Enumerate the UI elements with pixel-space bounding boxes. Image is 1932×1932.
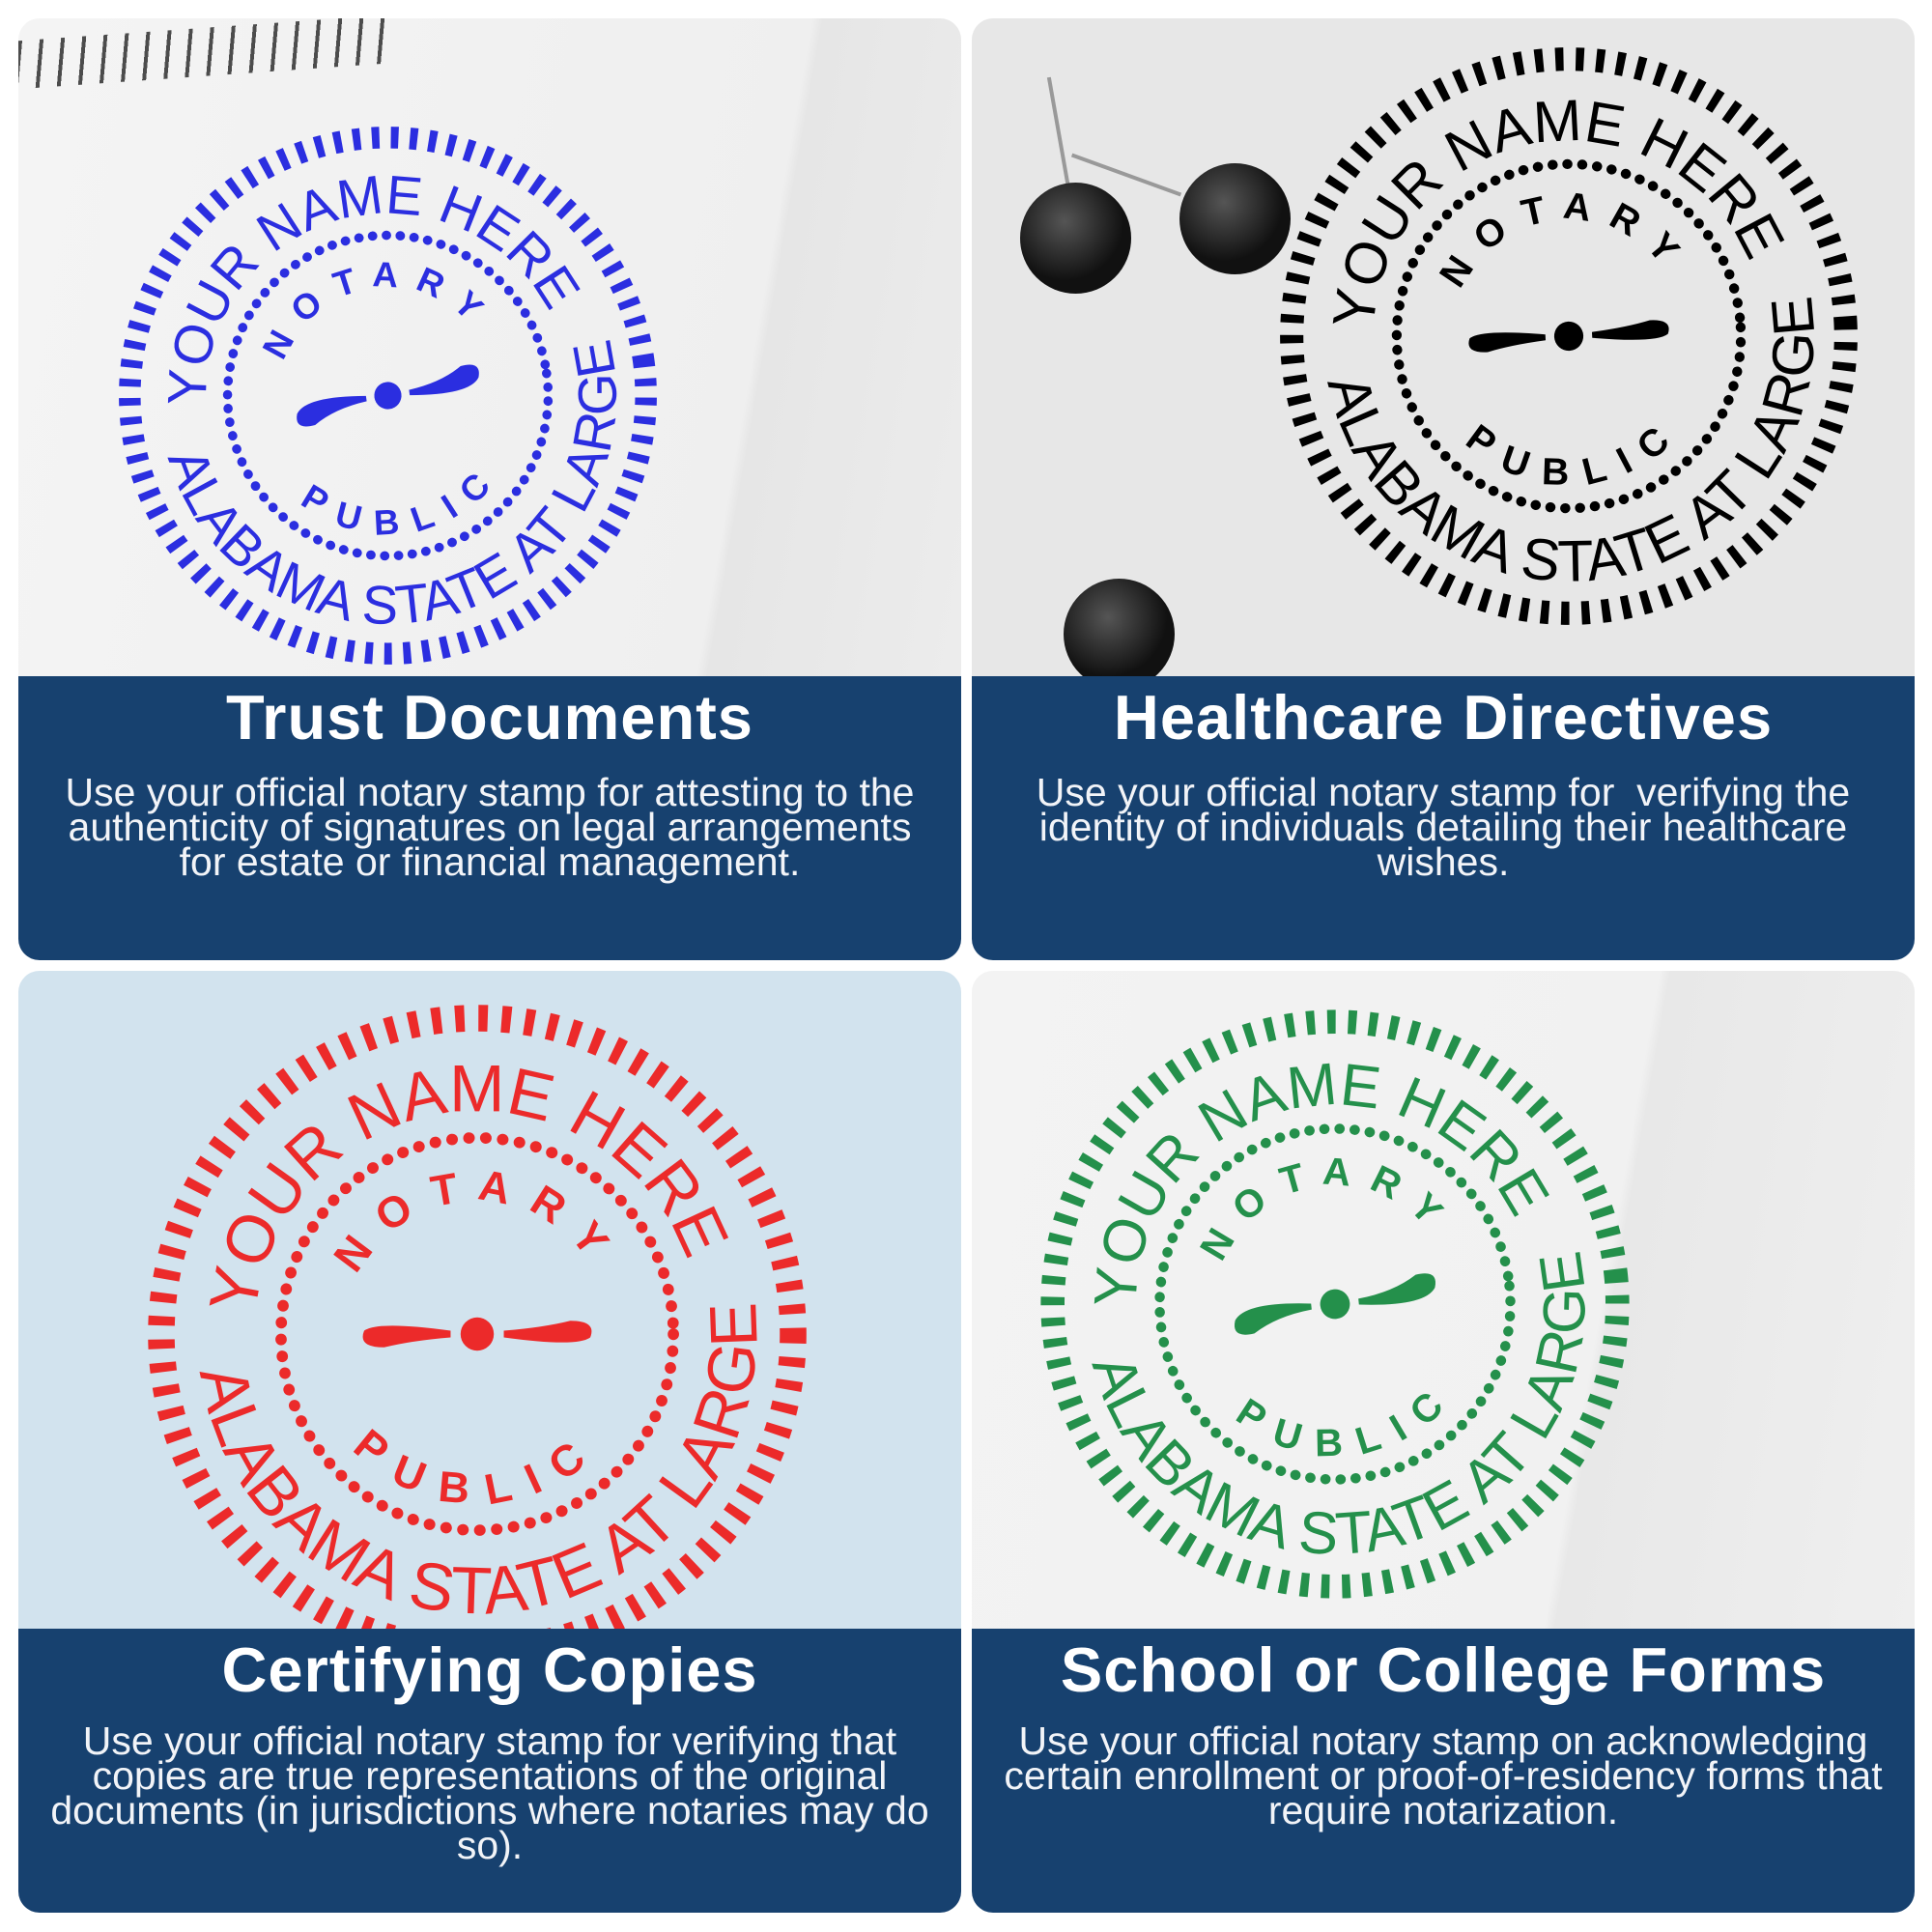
panel: certifying copies [18, 971, 961, 1913]
stamp: green: YOUR NAME HERE [1094, 1063, 1549, 1304]
panel: healthcare directives [972, 18, 1915, 960]
band: school forms text [972, 1629, 1915, 1913]
stamp: black: ALABAMA STATE AT LARGE [1327, 298, 1814, 582]
band: healthcare text: identity of individuals detailing their healthcare [1039, 805, 1847, 849]
stamp: black: YOUR NAME HERE [1333, 100, 1785, 324]
band: certifying copies text: so). [457, 1823, 523, 1867]
stamp: blue: YOUR NAME HERE [168, 176, 581, 404]
stamp: red: ALABAMA STATE AT LARGE [199, 1304, 757, 1614]
band: healthcare text [972, 676, 1915, 960]
stamp: black: NOTARY [1439, 193, 1681, 288]
stamp: green [1040, 1009, 1630, 1598]
panel: school or college forms [972, 971, 1915, 1913]
stamp: green: ALABAMA STATE AT LARGE [1092, 1252, 1585, 1554]
photo: notebook with blue stamp [18, 18, 961, 676]
photo: pins with black stamp [972, 18, 1915, 676]
stamp: red: PUBLIC [354, 1429, 583, 1505]
stamp: green: NOTARY [1200, 1157, 1445, 1261]
panel: trust documents [18, 18, 961, 960]
band: healthcare text: Healthcare Directives [1114, 682, 1773, 753]
band: healthcare text: Use your official notary stamp for verifying the [1037, 770, 1850, 814]
stamp: blue: PUBLIC [301, 475, 488, 535]
band: school forms text: require notarization. [1268, 1788, 1618, 1833]
notebook spiral [18, 15, 385, 89]
stamp: red: NOTARY [333, 1171, 611, 1273]
stamp: blue [119, 127, 657, 665]
stamp: black [1280, 47, 1858, 625]
band: school forms text: certain enrollment or proof-of-residency forms that [1004, 1753, 1883, 1798]
stamp: black: PUBLIC [1465, 423, 1667, 485]
photo: paper with green stamp [972, 971, 1915, 1629]
band: trust documents text: Trust Documents [226, 682, 753, 753]
band: school forms text: Use your official notary stamp on acknowledging [1019, 1719, 1867, 1763]
stamp: blue: ALABAMA STATE AT LARGE [167, 340, 616, 624]
stamp: red: YOUR NAME HERE [209, 1065, 728, 1306]
band: certifying copies text [18, 1629, 961, 1913]
band: school forms text: School or College Forms [1061, 1634, 1826, 1705]
band: certifying copies text: documents (in jurisdictions where notaries may do [50, 1788, 929, 1833]
band: trust documents text [18, 676, 961, 960]
band: trust documents text: for estate or financial management. [180, 839, 800, 884]
pins [1020, 77, 1291, 676]
band: healthcare text: wishes. [1378, 839, 1509, 884]
photo: light blue paper with red stamp [18, 971, 961, 1629]
stamp: blue: NOTARY [263, 263, 485, 359]
band: trust documents text: Use your official notary stamp for attesting to the [66, 770, 914, 814]
band: trust documents text: authenticity of signatures on legal arrangements [69, 805, 911, 849]
stamp: green: PUBLIC [1236, 1394, 1441, 1457]
stamp: red [148, 1005, 807, 1629]
band: certifying copies text: copies are true representations of the original [93, 1753, 887, 1798]
band: certifying copies text: Certifying Copies [221, 1634, 758, 1705]
band: certifying copies text: Use your official notary stamp for verifying that [83, 1719, 896, 1763]
